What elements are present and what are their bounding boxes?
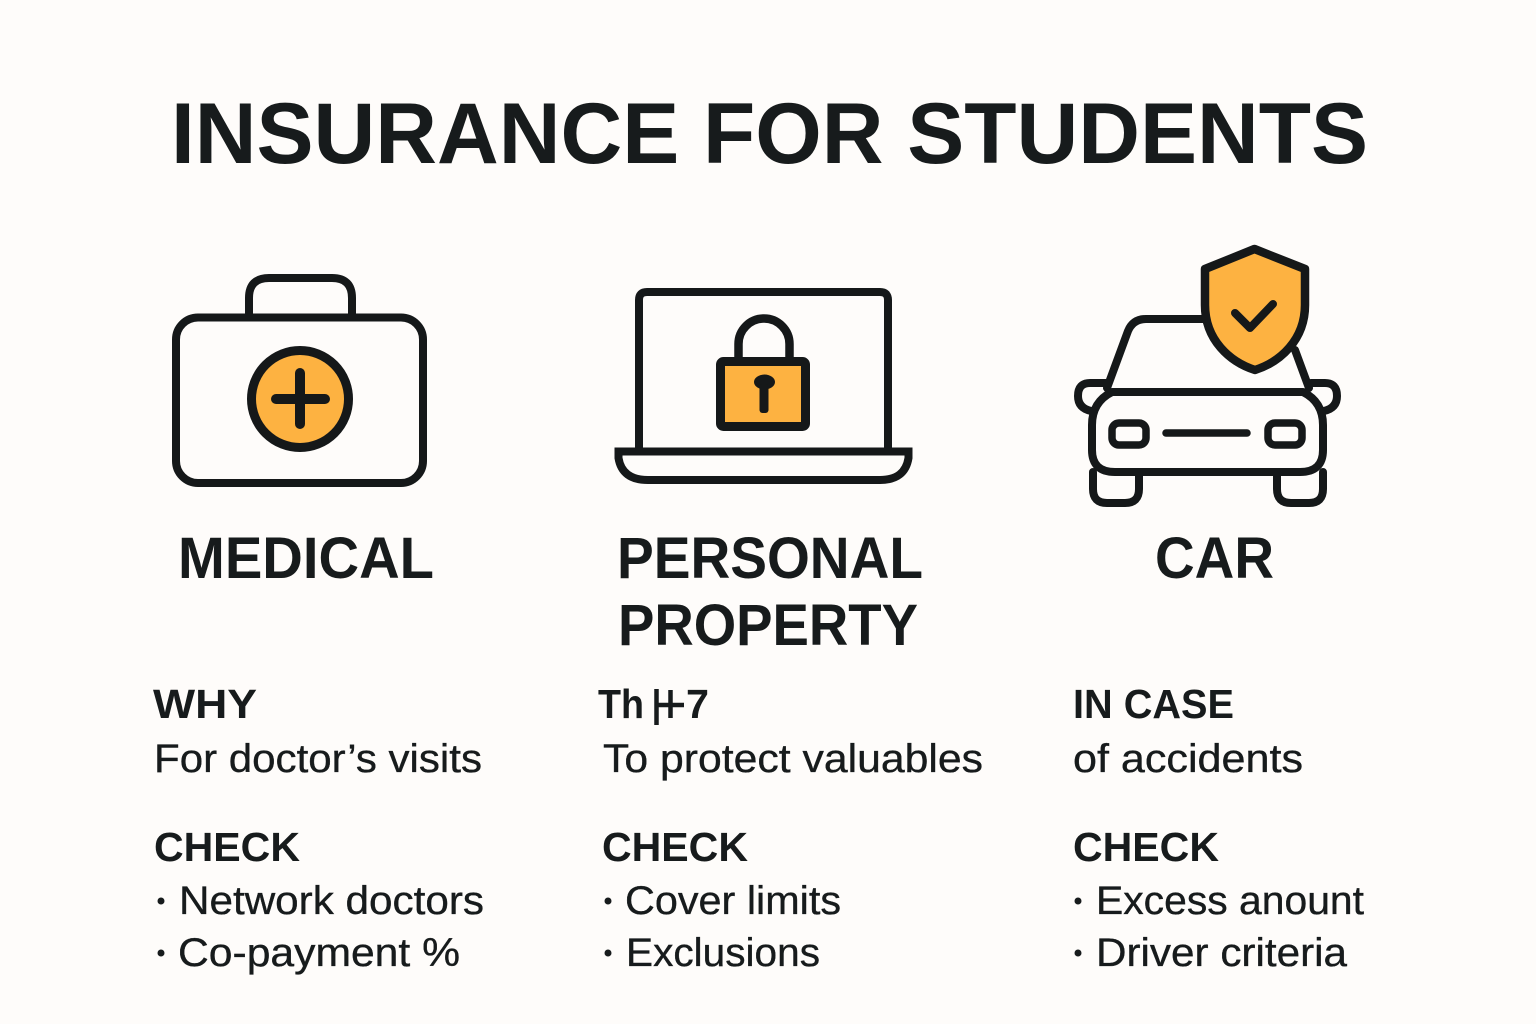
text block: in case bbox=[1073, 681, 1303, 781]
text block: why bbox=[153, 681, 482, 781]
text block: property check: Cover limits bbox=[625, 879, 841, 923]
icon: medical kit bbox=[176, 278, 423, 483]
text block: theft: 7 bbox=[686, 681, 709, 727]
title: INSURANCE FOR STUDENTS bbox=[171, 86, 1368, 182]
heading: car: CAR bbox=[1155, 526, 1274, 591]
text block: car check bbox=[1073, 824, 1364, 975]
text block: property check: Exclusions bbox=[626, 931, 820, 975]
text block: medical check bbox=[154, 824, 484, 975]
text block: theft: To protect valuables bbox=[603, 737, 983, 781]
icon: car with shield bbox=[1078, 249, 1337, 503]
text block: property check bbox=[602, 824, 841, 975]
text block: theft: Th bbox=[598, 681, 644, 727]
text block: why: For doctor’s visits bbox=[154, 737, 482, 781]
heading: medical: MEDICAL bbox=[178, 526, 434, 591]
heading: personal property bbox=[617, 526, 923, 658]
icon: keyhole bbox=[754, 374, 775, 413]
panel: medical bbox=[153, 278, 484, 975]
panel: car bbox=[1073, 249, 1364, 975]
icon: laptop with padlock bbox=[618, 292, 908, 480]
heading: personal property: PERSONAL bbox=[617, 526, 923, 591]
text block: in case: IN CASE bbox=[1073, 681, 1234, 727]
text block: property check: CHECK bbox=[602, 824, 748, 870]
heading: personal property: PROPERTY bbox=[618, 593, 918, 658]
text block: car check: Driver criteria bbox=[1096, 931, 1348, 975]
text block: car check: CHECK bbox=[1073, 824, 1219, 870]
text block: medical check: Co-payment % bbox=[178, 931, 460, 975]
panel: personal property bbox=[598, 292, 983, 975]
text block: medical check: Network doctors bbox=[179, 879, 484, 923]
icon: shield bbox=[1205, 249, 1305, 370]
text block: theft bbox=[598, 681, 983, 781]
text block: in case: of accidents bbox=[1073, 737, 1303, 781]
text block: why: WHY bbox=[153, 681, 257, 727]
text block: car check: Excess anount bbox=[1096, 879, 1364, 923]
text block: medical check: CHECK bbox=[154, 824, 300, 870]
